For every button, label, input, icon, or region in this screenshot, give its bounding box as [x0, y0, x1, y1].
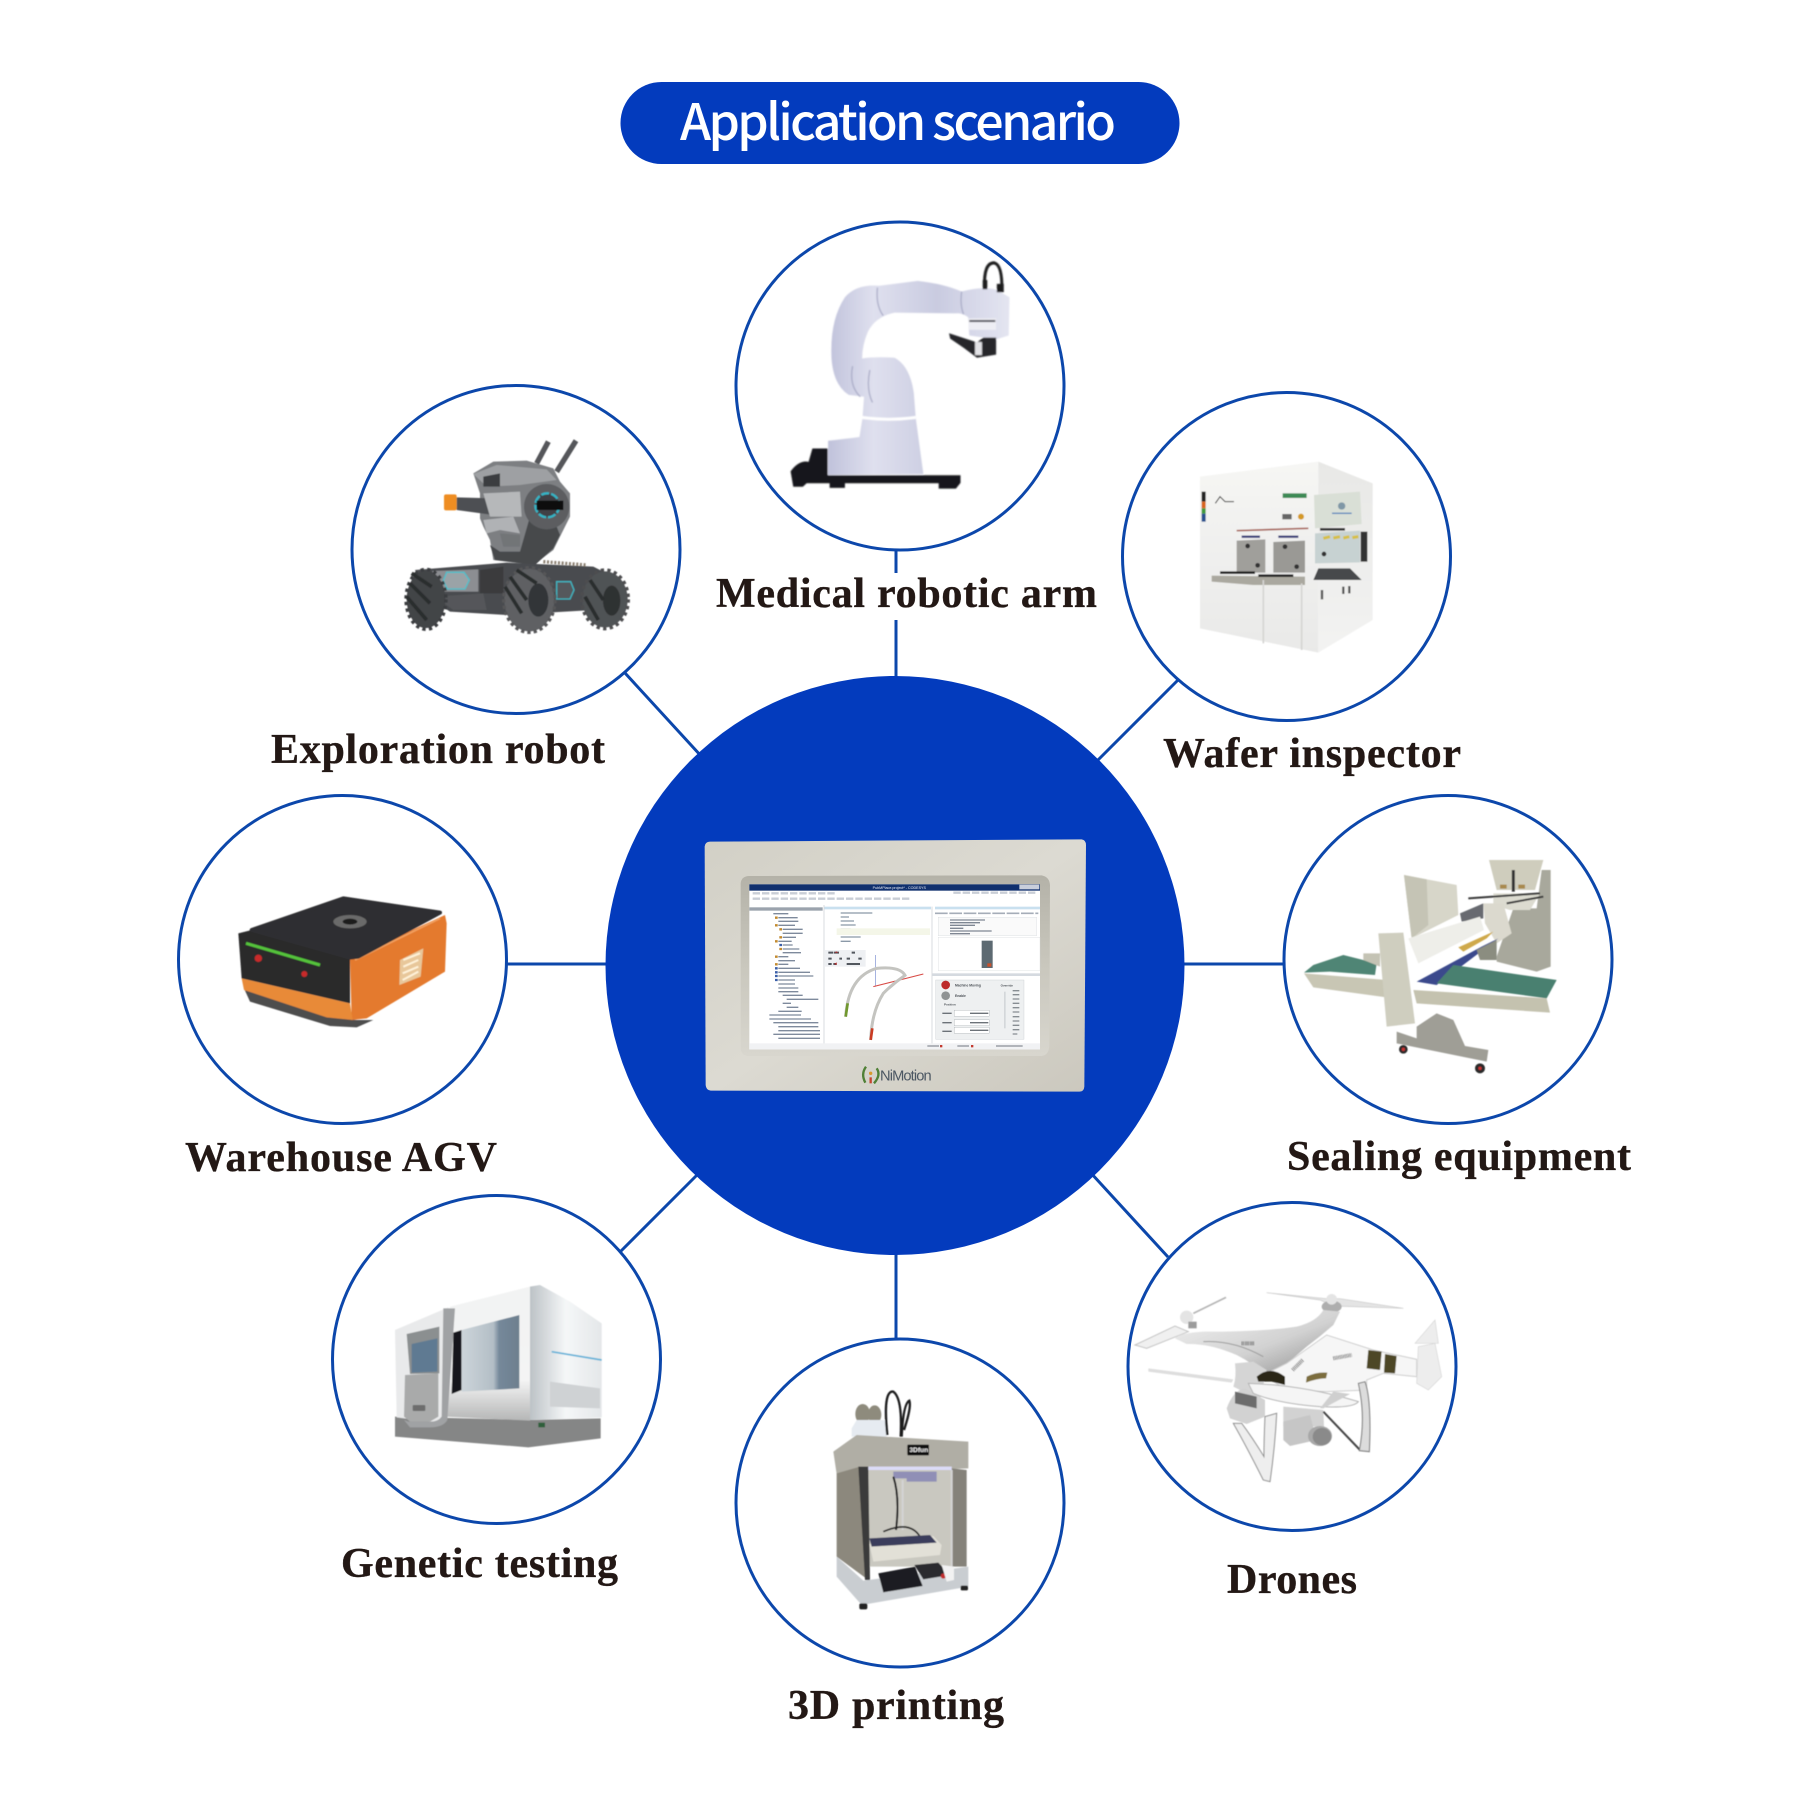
label: warehouse AGV: Warehouse AGV	[185, 1135, 497, 1181]
node: warehouse AGV	[178, 796, 506, 1181]
icon: drones	[1135, 1293, 1442, 1482]
connector: sealing equipment	[1180, 962, 1284, 966]
node: exploration robot	[271, 386, 680, 773]
node: medical robotic arm	[716, 222, 1097, 617]
label: 3D printing: 3D printing	[788, 1683, 1004, 1729]
screen: Position	[944, 1003, 956, 1007]
label: genetic testing: Genetic testing	[341, 1541, 618, 1587]
icon: warehouse AGV	[238, 898, 447, 1027]
title text: Application scenario	[680, 83, 1116, 155]
node: genetic testing	[332, 1196, 660, 1587]
icon: sealing equipment	[1304, 860, 1557, 1073]
label: drones: Drones	[1227, 1557, 1357, 1603]
icon: exploration robot	[406, 441, 628, 632]
screen: Machine Moving	[955, 984, 981, 988]
inner bevel	[741, 875, 1050, 1056]
icon: robotic arm	[791, 263, 1009, 489]
panel bezel	[705, 839, 1086, 1092]
node: 3D printing	[736, 1339, 1064, 1729]
central touchscreen panel	[705, 839, 1086, 1092]
icon: genetic testing	[395, 1285, 602, 1447]
connector: genetic testing	[620, 1172, 700, 1252]
screen: PubMPlace.project* - CODESYS	[873, 886, 926, 890]
node: wafer inspector	[1122, 392, 1461, 777]
connector: exploration robot	[625, 673, 702, 757]
screen: Override	[1001, 983, 1013, 987]
NiMotion logo: NiMotion	[880, 1069, 932, 1085]
connector: top	[894, 550, 898, 680]
icon: 3D printer: 3Dfun	[909, 1447, 928, 1454]
icon: 3D printer	[833, 1392, 968, 1609]
connector: 3D printing	[894, 1250, 898, 1340]
connector: wafer inspector	[1098, 680, 1178, 760]
connector: warehouse AGV	[507, 962, 610, 966]
screen: Enable	[955, 994, 966, 998]
icon: wafer inspector	[1200, 462, 1373, 653]
label: medical robotic arm: Medical robotic arm	[716, 571, 1097, 617]
node: drones	[1128, 1202, 1456, 1603]
label: wafer inspector: Wafer inspector	[1163, 731, 1461, 777]
screen	[749, 884, 1040, 1049]
connector: drones	[1090, 1172, 1168, 1257]
node: sealing equipment	[1284, 796, 1631, 1180]
label: exploration robot: Exploration robot	[271, 727, 605, 773]
NiMotion logo	[863, 1067, 932, 1085]
central hub circle	[606, 676, 1184, 1255]
label: sealing equipment: Sealing equipment	[1287, 1134, 1631, 1180]
title pill	[620, 82, 1180, 164]
